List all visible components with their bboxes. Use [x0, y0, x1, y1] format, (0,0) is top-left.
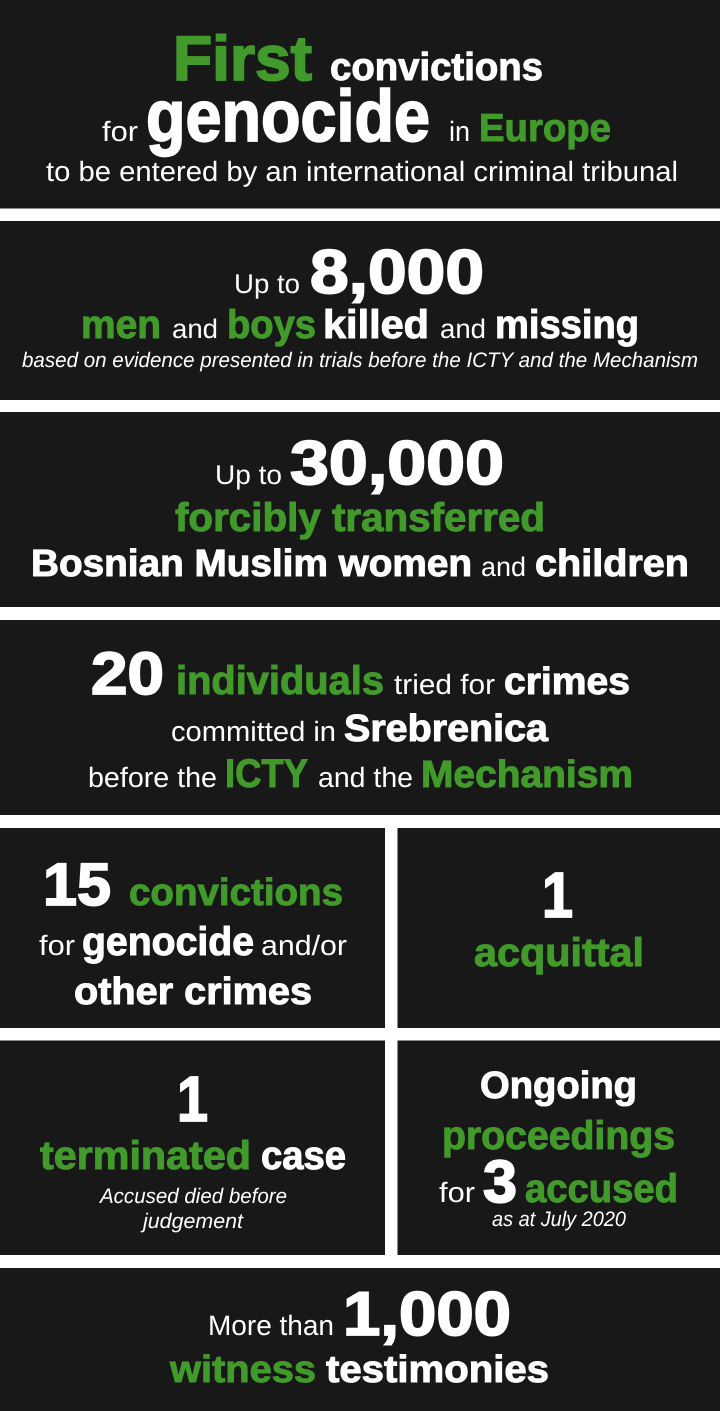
panel: 15 convictions	[0, 828, 385, 1028]
heading: for genocide in Europe: for	[102, 116, 138, 147]
text: committed in Srebrenica: Srebrenica	[344, 708, 549, 750]
text: men and boys killed and missing: missing	[495, 303, 639, 347]
panel: 1 terminated case	[0, 1040, 385, 1255]
heading: for genocide in Europe	[102, 76, 611, 157]
text: before the ICTY and the Mechanism: and the	[318, 762, 413, 793]
text: men and boys killed and missing: boys	[227, 303, 316, 347]
text: witness testimonies: testimonies	[326, 1349, 549, 1391]
text: witness testimonies: witness	[169, 1349, 316, 1391]
text: before the ICTY and the Mechanism: ICTY	[225, 752, 308, 796]
stat: more than 1,000: More than	[208, 1310, 334, 1341]
stat: 20 individuals tried for crimes	[91, 640, 630, 707]
text: Ongoing: Ongoing	[480, 1065, 637, 1107]
stat: 15 convictions: 15	[43, 851, 111, 918]
panel: first convictions	[0, 0, 720, 208]
stat: for 3 accused: for	[439, 1177, 475, 1208]
heading: for genocide in Europe: in	[449, 116, 470, 147]
text: other crimes: other crimes	[74, 971, 312, 1013]
text: for genocide and/or: and/or	[261, 930, 347, 961]
stat: 1: 1	[542, 859, 573, 931]
stat: 20 individuals tried for crimes: crimes	[504, 661, 630, 703]
text: committed in Srebrenica	[171, 708, 549, 750]
panel: men and boys killed and missing	[0, 221, 720, 400]
text: before the ICTY and the Mechanism: before the	[88, 762, 217, 793]
stat: more than 1,000	[208, 1280, 511, 1349]
stat: 20 individuals tried for crimes: 20	[91, 640, 164, 707]
text: committed in Srebrenica: committed in	[171, 716, 336, 747]
text: forcibly transferred: forcibly transferred	[175, 496, 545, 540]
stat: up to 30,000: Up to	[215, 460, 282, 490]
text: terminated case: case	[261, 1134, 346, 1178]
panel: forcibly transferred	[0, 412, 720, 607]
stat: 20 individuals tried for crimes: tried for	[394, 669, 495, 700]
stat: up to 8,000	[234, 238, 484, 307]
text: men and boys killed and missing: and	[440, 314, 486, 344]
text: for genocide and/or: genocide	[82, 920, 254, 964]
panel: ongoing proceedings	[398, 1040, 720, 1255]
text: acquittal: acquittal	[474, 931, 644, 975]
stat: 20 individuals tried for crimes: individuals	[176, 659, 384, 703]
stat: for 3 accused: 3	[483, 1148, 517, 1215]
text: witness testimonies	[169, 1349, 549, 1391]
text: terminated case: terminated	[40, 1134, 251, 1178]
heading: First convictions	[173, 24, 543, 94]
text: men and boys killed and missing: men	[81, 303, 161, 347]
text: Bosnian Muslim women and children: and	[481, 552, 526, 582]
text: evidence note: based on evidence presented in trials before the ICTY and the Mechanism	[22, 349, 698, 372]
panel: witness testimonies	[0, 1268, 720, 1411]
text: terminated case	[40, 1134, 346, 1178]
text: accused died note: judgement	[140, 1210, 244, 1233]
heading: for genocide in Europe: genocide	[146, 76, 430, 157]
text: for genocide and/or	[39, 920, 347, 964]
heading: First convictions: convictions	[330, 46, 543, 89]
panel: 20 individuals	[0, 620, 720, 815]
stat: 1: 1	[177, 1063, 208, 1135]
text: Bosnian Muslim women and children: children	[535, 543, 689, 585]
stat: up to 30,000: 30,000	[290, 429, 504, 498]
text: before the ICTY and the Mechanism	[88, 752, 633, 796]
text: men and boys killed and missing	[81, 303, 639, 347]
stat: up to 8,000: 8,000	[310, 238, 484, 307]
text: Bosnian Muslim women and children: Bosnian Muslim women	[31, 543, 472, 585]
text: Bosnian Muslim women and children	[31, 543, 689, 585]
stat: 15 convictions	[43, 851, 343, 918]
text: accused died note: Accused died before	[98, 1185, 287, 1208]
stat: for 3 accused: accused	[525, 1167, 678, 1211]
stat: up to 8,000: Up to	[234, 269, 300, 299]
heading: for genocide in Europe: Europe	[479, 107, 611, 150]
heading: First convictions: First	[173, 24, 312, 94]
text: tribunal subtitle: to be entered by an international criminal tribunal	[46, 156, 678, 187]
stat: up to 30,000	[215, 429, 504, 498]
text: men and boys killed and missing: killed	[323, 303, 429, 347]
text: men and boys killed and missing: and	[172, 314, 218, 344]
text: for genocide and/or: for	[39, 930, 75, 961]
stat: more than 1,000: 1,000	[343, 1280, 511, 1349]
text: before the ICTY and the Mechanism: Mechanism	[421, 754, 633, 796]
stat: 15 convictions: convictions	[129, 872, 343, 914]
text: date note: as at July 2020	[492, 1208, 626, 1231]
stat: for 3 accused	[439, 1148, 678, 1215]
panel: 1 acquittal	[398, 828, 720, 1028]
text: proceedings: proceedings	[442, 1114, 675, 1158]
text: accused died note	[98, 1185, 287, 1233]
